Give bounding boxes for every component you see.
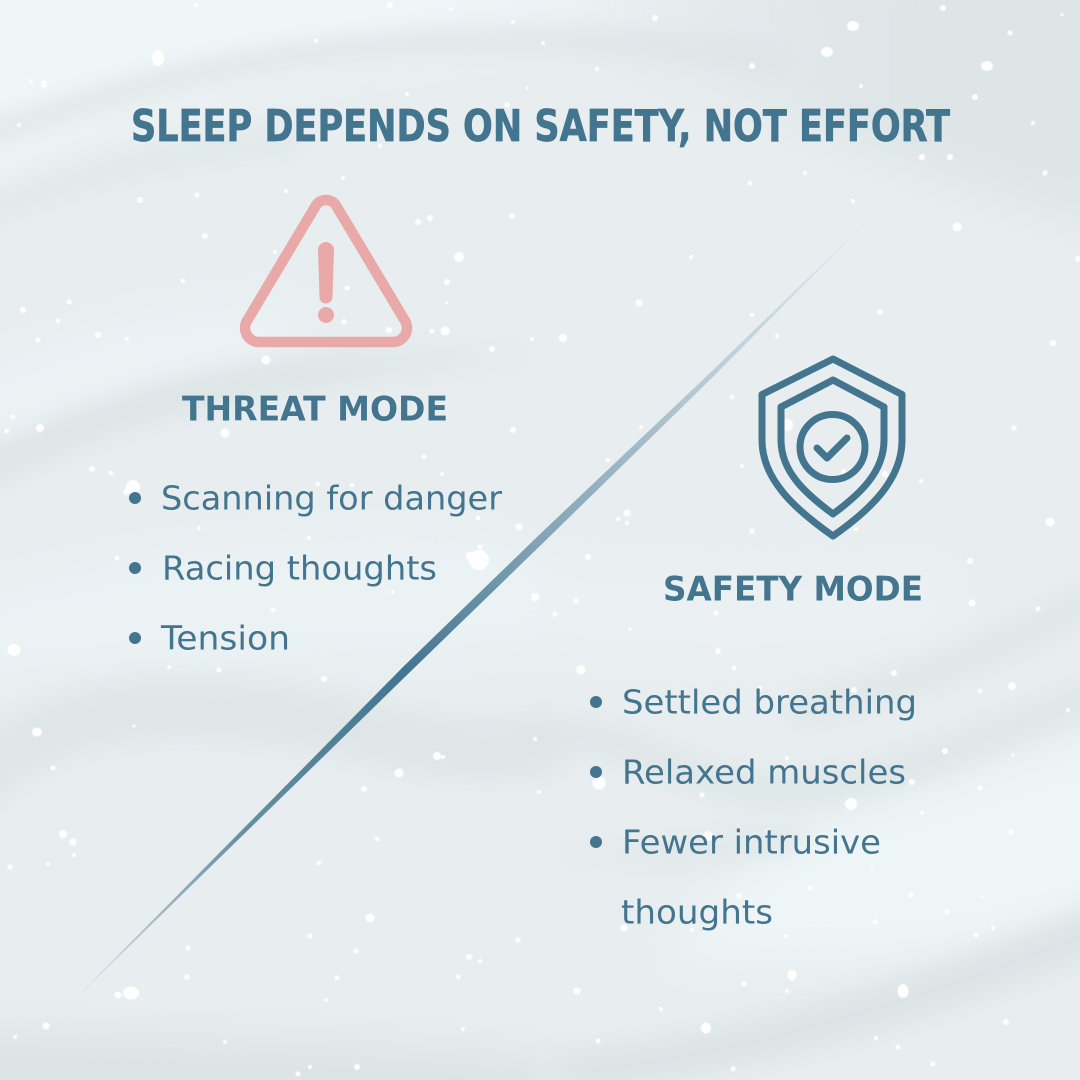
icon: shield with check bbox=[762, 359, 902, 536]
diagonal divider bbox=[65, 207, 881, 1009]
threat bullet list bbox=[129, 478, 502, 658]
safety bullet list bbox=[590, 682, 917, 932]
panel: safety mode bbox=[590, 570, 923, 932]
safety bullet list: thoughts bbox=[621, 892, 773, 932]
safety bullet list: Fewer intrusive bbox=[622, 822, 881, 862]
threat bullet list: Tension bbox=[160, 618, 290, 658]
safety bullet list: Relaxed muscles bbox=[622, 752, 906, 792]
threat bullet list: Scanning for danger bbox=[161, 478, 502, 518]
safety bullet list: Settled breathing bbox=[622, 682, 917, 722]
panel: threat mode bbox=[129, 390, 502, 658]
icon: warning triangle bbox=[245, 200, 407, 342]
threat bullet list: Racing thoughts bbox=[162, 548, 437, 588]
threat heading: THREAT MODE bbox=[182, 390, 448, 430]
safety heading: SAFETY MODE bbox=[663, 570, 923, 610]
